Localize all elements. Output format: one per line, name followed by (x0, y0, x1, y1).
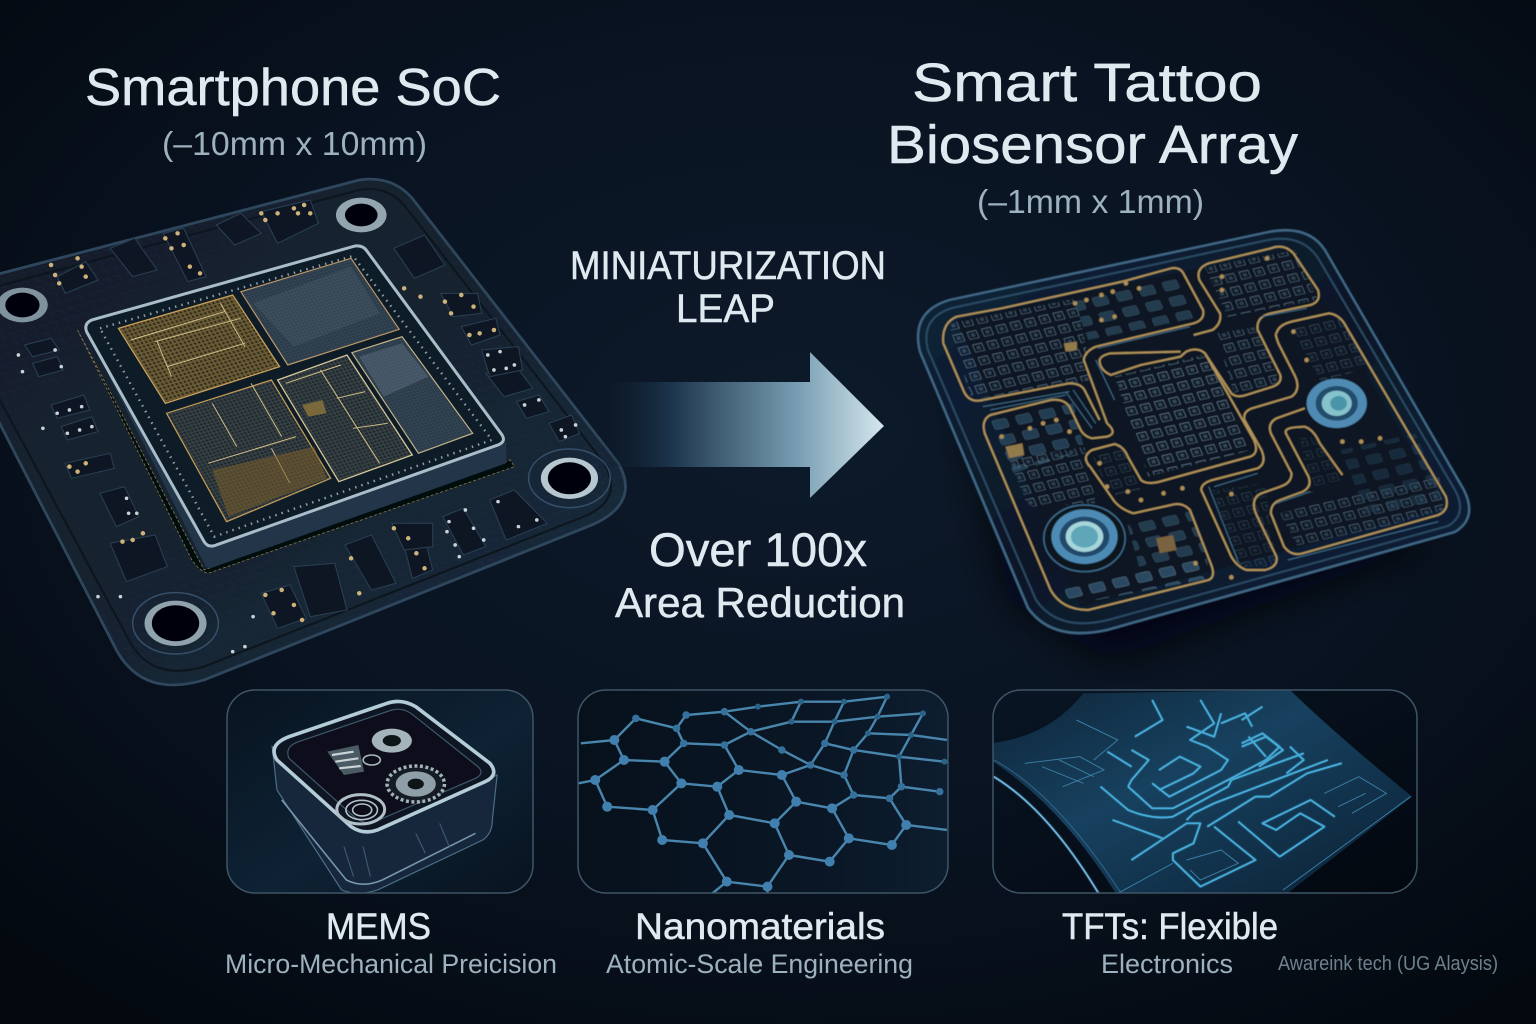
heading: miniaturization leap: MINIATURIZATION (570, 244, 886, 288)
biosensor electrode, right (1307, 379, 1367, 428)
package pad dots (100, 256, 492, 537)
heading: miniaturization leap (570, 244, 886, 331)
sensor cell regions (949, 298, 1092, 400)
title: smart tattoo biosensor array: Biosensor Array (887, 115, 1298, 175)
icon: flexible circuit sheet (990, 690, 1412, 897)
mounting holes (0, 198, 610, 654)
die bus lines (131, 303, 388, 483)
board inner contour (0, 189, 611, 671)
SoC package (86, 246, 506, 568)
title: smart tattoo biosensor array: Smart Tattoo (912, 53, 1262, 113)
panel: smart tattoo biosensor board (918, 230, 1469, 660)
caption: MEMS: MEMS (326, 906, 431, 947)
gold pads (1002, 258, 1380, 577)
title: smartphone SoC: Smartphone SoC (85, 59, 501, 117)
package top (86, 246, 503, 546)
board inner ring (926, 239, 1460, 623)
source note: Awareink tech (UG Alaysis) (1278, 953, 1498, 975)
size: SoC: (–10mm x 10mm) (162, 125, 427, 162)
callout: area reduction (615, 523, 905, 626)
die gold highlights (212, 447, 327, 517)
board shadow (960, 380, 1440, 660)
icon: MEMS glass box (272, 701, 497, 893)
gold square pads (1005, 443, 1024, 458)
caption: TFTs: TFTs: Flexible (1062, 906, 1278, 947)
caption: nanomaterials (606, 906, 913, 979)
icon: hexagonal lattice (578, 697, 947, 893)
board body (918, 230, 1469, 633)
panel border (227, 690, 533, 893)
panel: flexible TFTs (990, 690, 1417, 897)
blue parallel traces (983, 308, 1438, 563)
heading: miniaturization leap: LEAP (676, 287, 775, 331)
gear: center (387, 766, 444, 802)
package side (86, 330, 506, 568)
die: middle block (278, 355, 412, 482)
arrow: miniaturization direction (600, 352, 884, 498)
gear: top (372, 729, 412, 753)
gear: spiral (337, 795, 385, 824)
caption: nanomaterials: Nanomaterials (635, 906, 885, 947)
size: tattoo: (–1mm x 1mm) (977, 183, 1204, 220)
board body (0, 179, 625, 685)
die: right block (352, 337, 473, 453)
component pins (51, 205, 494, 620)
caption: TFTs: Electronics (1101, 949, 1233, 979)
title: smart tattoo biosensor array (887, 53, 1298, 220)
gold traces (943, 247, 1447, 610)
caption: nanomaterials: Atomic-Scale Engineering (606, 949, 913, 979)
panel: nanomaterials (578, 690, 948, 893)
die: graphite block (241, 258, 399, 365)
spring parts (327, 745, 364, 775)
callout: area reduction: Over 100x (649, 523, 867, 576)
panel border (578, 690, 948, 893)
caption: TFTs (1062, 906, 1278, 979)
board dark circuit field (956, 248, 1446, 607)
panel border (993, 690, 1417, 893)
title: smartphone SoC (85, 59, 501, 162)
callout: area reduction: Area Reduction (615, 579, 905, 626)
die: bottom left block (167, 380, 331, 522)
caption: MEMS: Micro-Mechanical Preicision (225, 949, 557, 979)
die: gold block (118, 295, 280, 403)
panel: MEMS (227, 690, 533, 893)
surface components (24, 200, 580, 628)
caption: MEMS (225, 906, 557, 979)
chip shadow and underfill (78, 330, 514, 573)
panel: smartphone SoC board (0, 179, 625, 685)
biosensor electrode, lower left (1044, 505, 1125, 572)
